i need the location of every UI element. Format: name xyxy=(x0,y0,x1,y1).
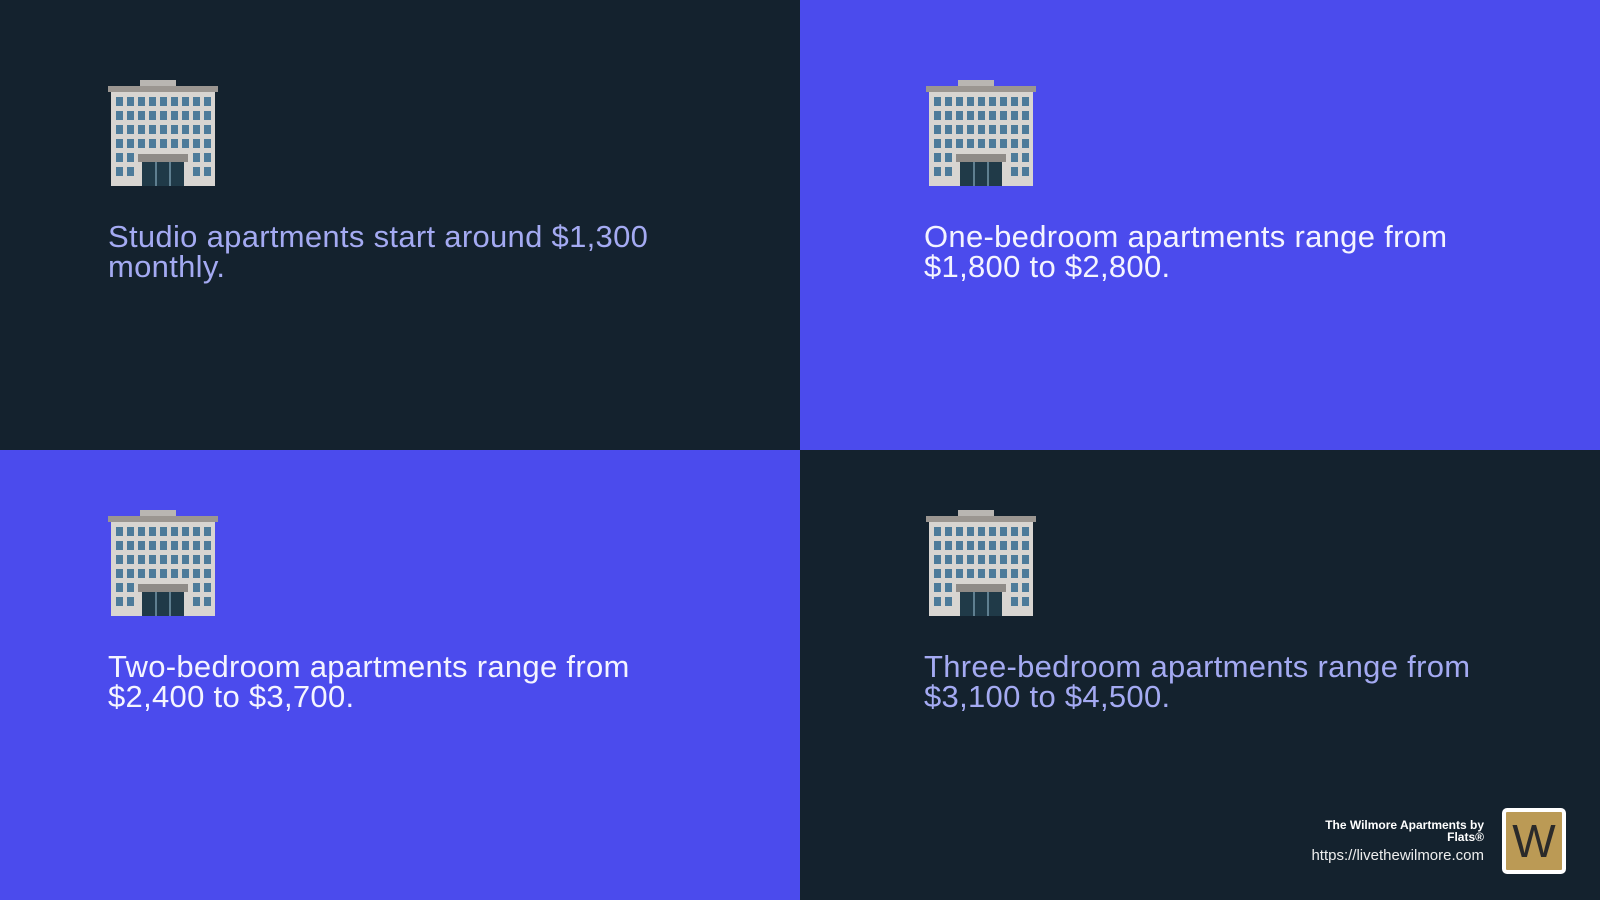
text: one-bedroom price xyxy=(924,219,1447,284)
text: two-bedroom price: $2,400 to $3,700. xyxy=(108,679,354,714)
brand text: https://livethewilmore.com xyxy=(1311,847,1484,864)
footer: brand xyxy=(1311,808,1566,874)
brand text: The Wilmore Apartments by xyxy=(1325,818,1484,832)
panel: three-bedroom xyxy=(800,450,1600,900)
icon: building xyxy=(108,80,218,186)
icon: building xyxy=(926,80,1036,186)
text: studio price: Studio apartments start around $1,300 xyxy=(108,219,648,254)
panel: studio xyxy=(0,0,800,450)
text: one-bedroom price: $1,800 to $2,800. xyxy=(924,249,1170,284)
text: three-bedroom price xyxy=(924,649,1470,714)
icon: building xyxy=(926,510,1036,616)
panel: one-bedroom xyxy=(800,0,1600,450)
text: two-bedroom price: Two-bedroom apartments range from xyxy=(108,649,630,684)
text: three-bedroom price: Three-bedroom apartments range from xyxy=(924,649,1470,684)
text: studio price: monthly. xyxy=(108,249,225,284)
icon: building xyxy=(108,510,218,616)
text: two-bedroom price xyxy=(108,649,630,714)
logo: W xyxy=(1512,815,1556,867)
text: three-bedroom price: $3,100 to $4,500. xyxy=(924,679,1170,714)
text: one-bedroom price: One-bedroom apartments range from xyxy=(924,219,1447,254)
panel: two-bedroom xyxy=(0,450,800,900)
text: studio price xyxy=(108,219,648,284)
brand text: Flats® xyxy=(1447,830,1484,844)
brand text xyxy=(1311,818,1484,864)
logo xyxy=(1502,808,1566,874)
